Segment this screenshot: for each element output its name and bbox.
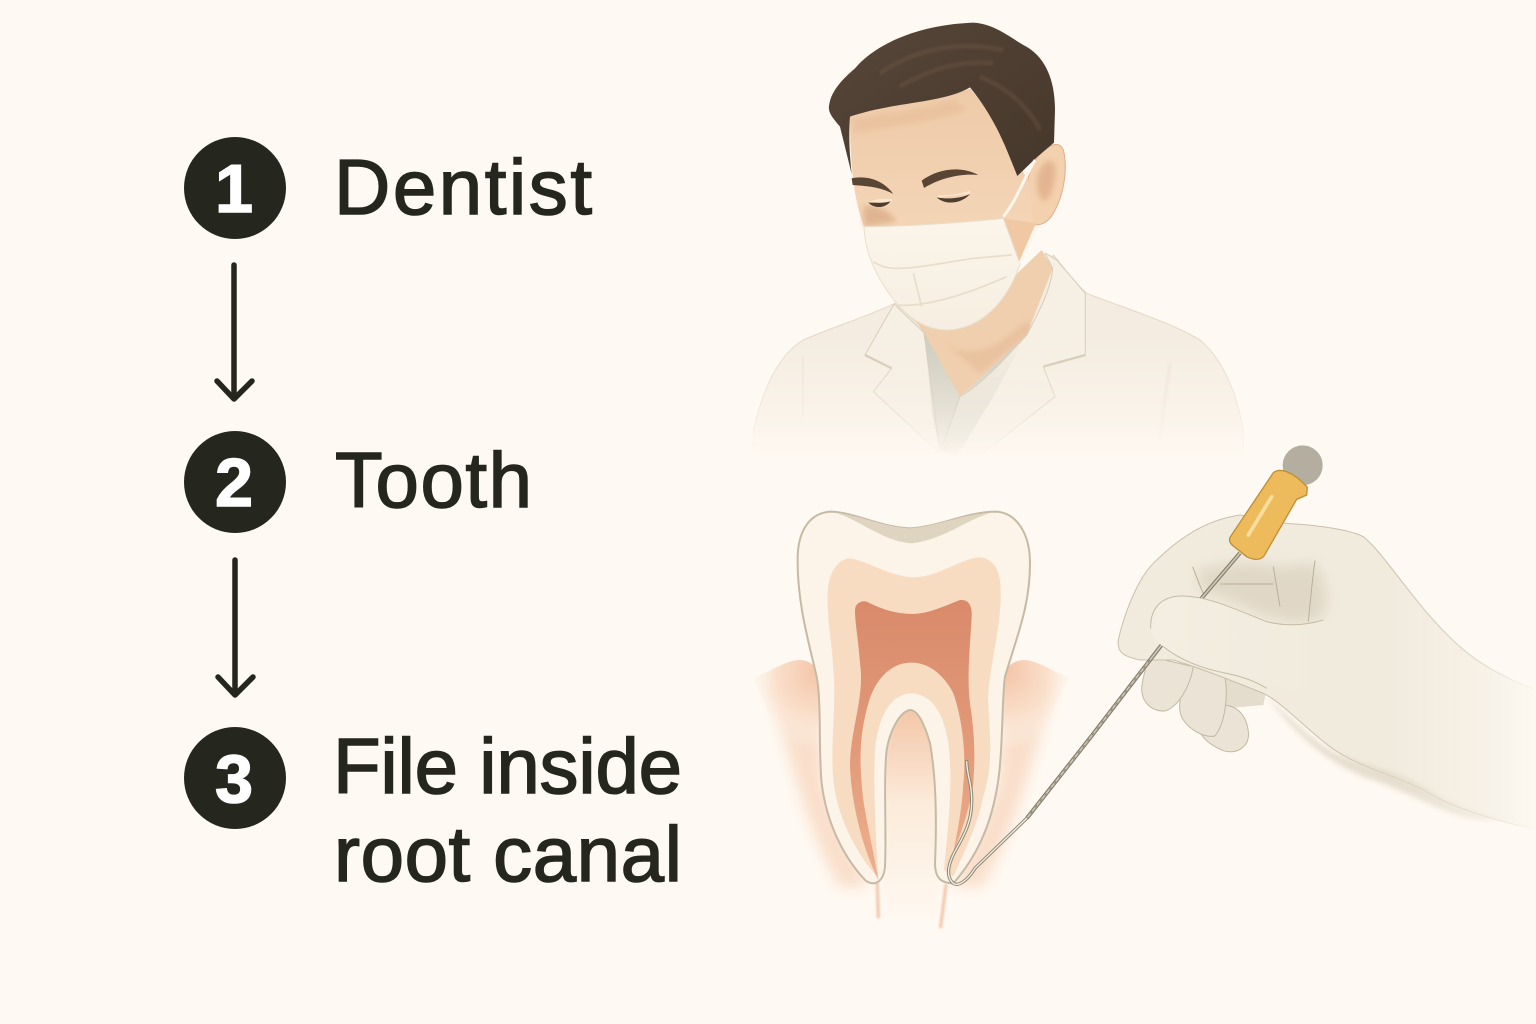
hair [829,23,1055,176]
illustration: gloved hand holding endodontic file [1027,445,1536,830]
closed eyes [868,191,971,207]
step 2 number badge: 2 [215,445,253,521]
illustration: dentist with surgical mask [753,23,1243,483]
white coat [753,254,1244,438]
back of hand [1118,515,1536,830]
pulp chamber and canals [850,600,974,880]
enamel outer shape [798,512,1030,883]
file shaft [1027,553,1240,818]
bone between roots [883,707,940,923]
step 3 label: File inside root canal [333,722,682,898]
step 2 label: Tooth: Tooth [335,436,532,524]
arrow: step 1 to step 2 [217,265,252,399]
file tip inside canal [949,762,1027,884]
thumb [1151,596,1340,693]
lower fingers [1142,657,1248,752]
gum right [953,660,1070,887]
yellow handle [1230,470,1307,559]
gray ball tip [1283,445,1323,485]
illustration: tooth cross-section with gums [753,512,1070,927]
step 3 number badge [184,727,286,829]
step 3 label: File inside root canal: File inside [333,722,682,810]
ear [1027,144,1065,225]
eyebrows [852,169,978,194]
scrub top [924,334,1022,440]
face [850,88,1033,277]
step 1 label: Dentist: Dentist [334,143,592,231]
arrow: step 2 to step 3 [218,560,253,695]
gum left [753,660,868,887]
crown groove shading [835,513,992,543]
shaded gap behind fingers [1190,660,1267,708]
step 1 number badge: 1 [215,151,253,227]
root tip vessels [877,883,946,927]
coat lapels [864,252,1086,442]
step 3 number badge: 3 [215,741,253,817]
step 2 number badge [184,431,286,533]
mask [864,218,1020,330]
neck [913,250,1053,397]
palm shadow and creases [1193,561,1327,623]
step 3 label: File inside root canal: root canal [334,810,682,898]
dentin [828,557,1001,878]
step 1 number badge [184,137,286,239]
mask ear loops [1003,160,1036,263]
